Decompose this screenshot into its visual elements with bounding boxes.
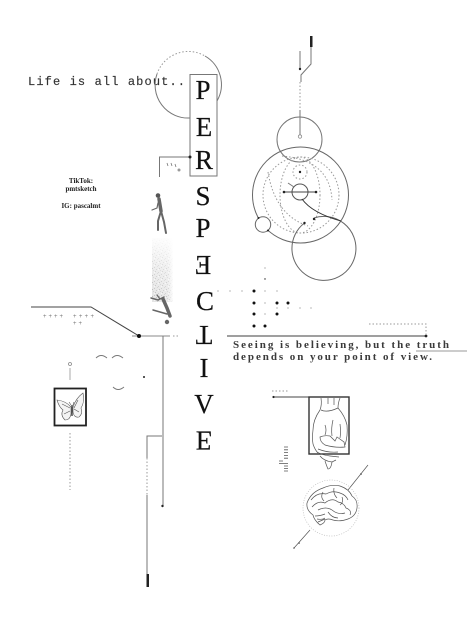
social credits: IG: pascalmt [61,202,101,210]
small dot [143,376,145,378]
hand frame [309,397,349,454]
angled line connector [31,307,180,338]
title: PERSPECTIVE [194,75,214,456]
dot matrix [217,267,312,328]
bracket with dot by title [160,156,192,177]
intro text: Life is all about.. [28,75,185,89]
social credits: TikTok: [69,177,93,185]
title: PERSPECTIVE: E [196,112,212,142]
title: PERSPECTIVE: C [196,286,214,316]
butterfly frame [54,388,86,426]
title: PERSPECTIVE: I [200,353,208,383]
butterfly pin line [68,362,72,380]
plus marks [43,314,94,327]
quote [233,339,449,363]
brain drawing [307,485,357,525]
eyes arcs [96,356,124,390]
brain dotted ring [303,480,359,536]
title: PERSPECTIVE: E [195,250,211,280]
title: PERSPECTIVE: T [196,320,213,350]
title: PERSPECTIVE: E [196,426,212,456]
social credits [61,177,101,210]
ruler ticks [279,447,288,471]
butterfly [57,393,84,420]
quote rule with dotted corner [227,324,467,351]
brain target lines [293,465,368,549]
circle behind title [155,51,221,118]
quote: depends on your point of view. [233,351,432,363]
title: PERSPECTIVE: S [195,181,211,211]
title: PERSPECTIVE: P [195,213,211,243]
plus marks: ++ [73,321,82,327]
falling figure [152,193,166,233]
social credits: pmtsketch [65,185,97,193]
title: PERSPECTIVE: R [195,145,213,175]
plus marks: ++++ [73,314,94,320]
branching vertical lines [146,336,164,587]
stippled texture column [152,238,173,302]
hand drawing [312,398,347,469]
title: PERSPECTIVE: P [195,75,211,105]
quote: Seeing is believing, but the truth [233,339,449,351]
circle diagram [252,36,356,280]
inverted figure [151,295,170,324]
title: PERSPECTIVE: V [194,389,214,419]
dotted line below butterfly [69,433,71,490]
plus marks: ++++ [43,314,63,320]
title frame [190,74,217,176]
hand pointer line [272,391,309,398]
